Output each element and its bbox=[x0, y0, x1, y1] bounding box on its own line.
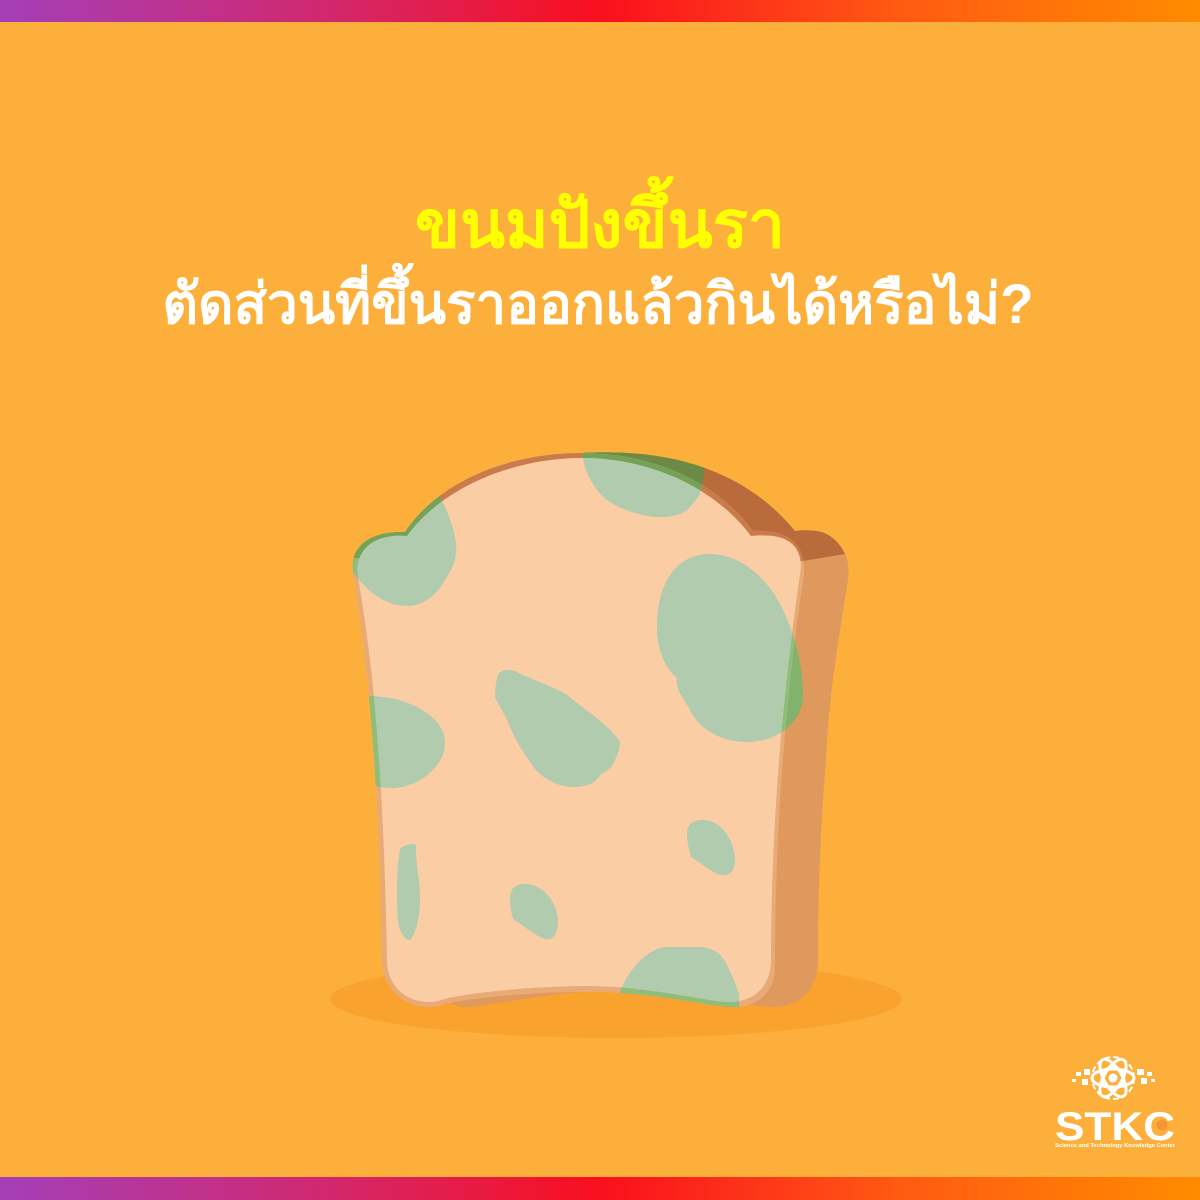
bread face bbox=[357, 458, 801, 1002]
top gradient bar bbox=[0, 0, 1200, 22]
title bbox=[162, 175, 1034, 335]
logo tagline: Science and Technology Knowledge Center bbox=[1055, 1143, 1176, 1149]
bread side bbox=[450, 452, 848, 1007]
title line 1: yellow: ขนมปังขึ้นรา bbox=[415, 175, 785, 261]
wordmark: STKC bbox=[1055, 1105, 1175, 1149]
bread front crust bbox=[330, 440, 804, 1020]
mold patches bbox=[358, 458, 792, 1002]
bottom gradient bar bbox=[0, 1177, 1200, 1200]
data squares bbox=[1072, 1069, 1155, 1085]
bread top crust bbox=[582, 452, 845, 561]
title line 2: white: ตัดส่วนที่ขึ้นราออกแล้วกินได้หรือไม่? bbox=[162, 263, 1034, 335]
STKC logo bbox=[1055, 1055, 1176, 1149]
ground shadow bbox=[330, 960, 902, 1038]
atom icon bbox=[1092, 1055, 1134, 1101]
logo orange dot bbox=[1156, 1120, 1168, 1130]
moldy bread slice bbox=[330, 440, 849, 1020]
